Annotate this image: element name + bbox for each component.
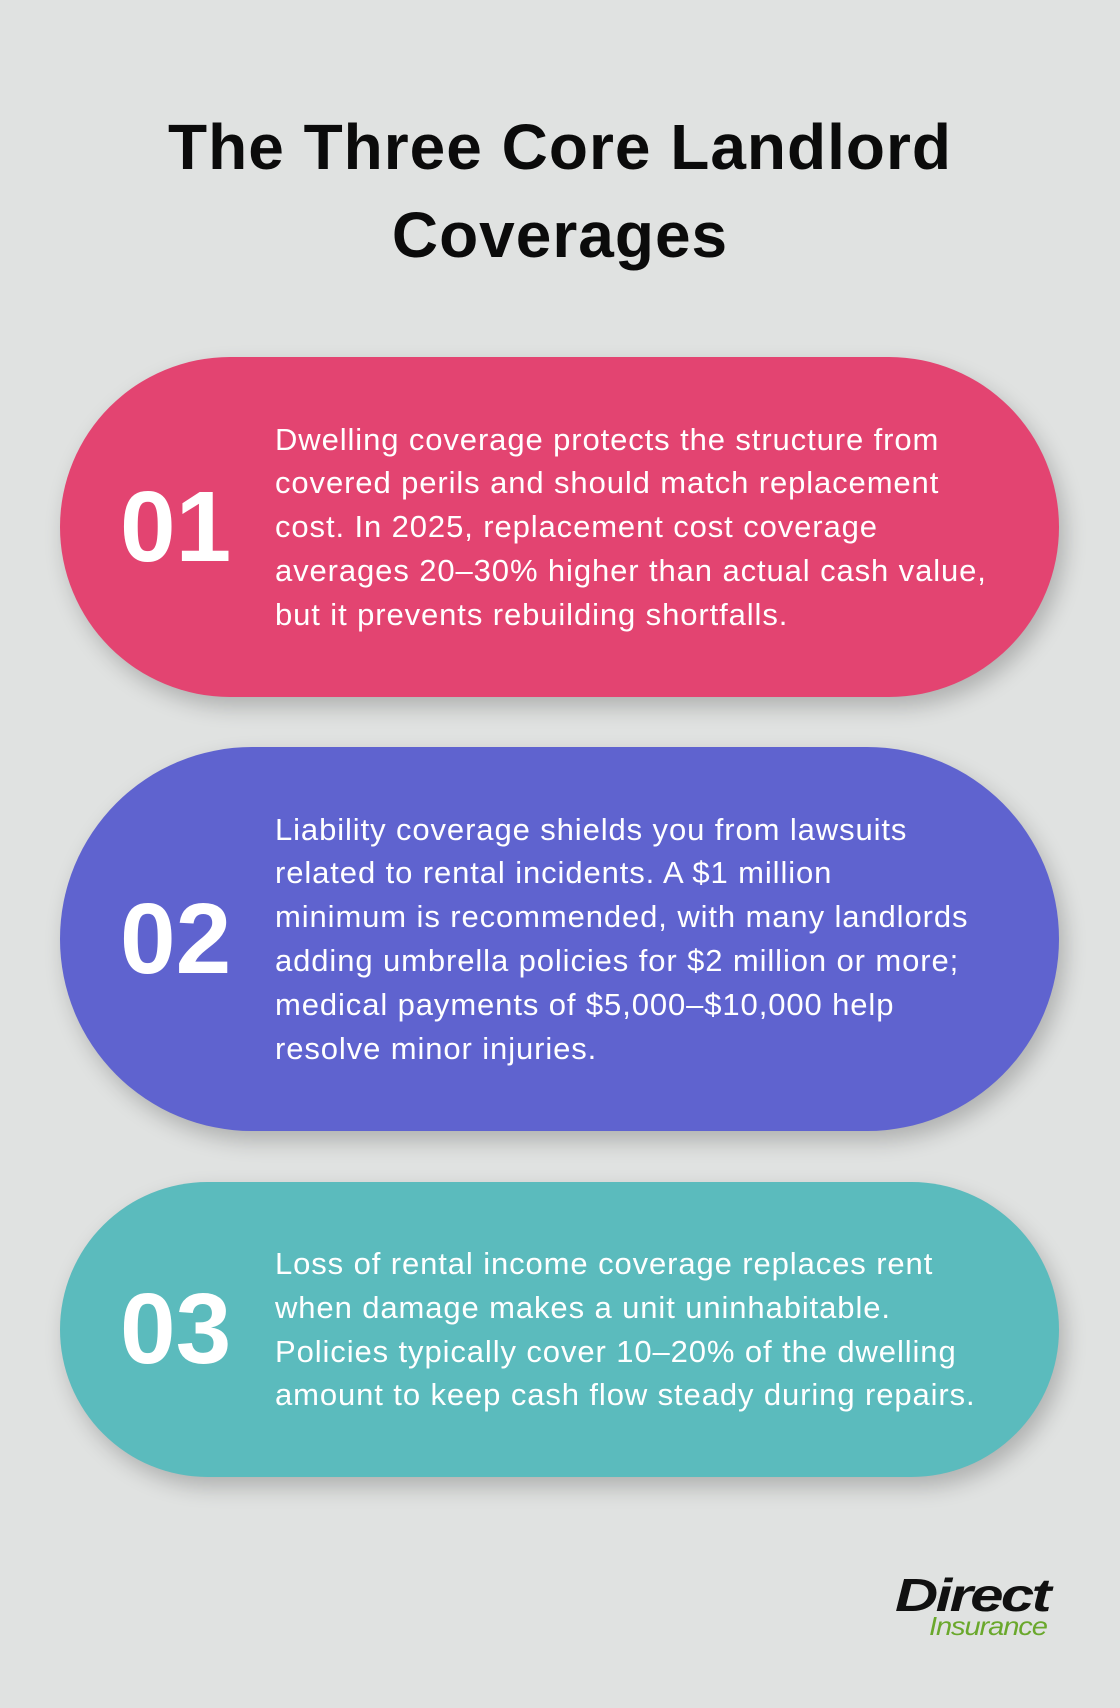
- text: liability: medical payments of $5,000–$10,000 help: [275, 987, 894, 1022]
- text: dwelling: averages 20–30% higher than actual cash value,: [275, 553, 987, 588]
- text: rental income: [275, 1246, 976, 1412]
- number 01: 01: [120, 470, 231, 582]
- number 03: 03: [120, 1273, 231, 1385]
- text: dwelling: [275, 422, 987, 632]
- text: rental income: amount to keep cash flow steady during repairs.: [275, 1377, 976, 1412]
- text: rental income: when damage makes a unit uninhabitable.: [275, 1290, 891, 1325]
- panel: dwelling coverage: [60, 357, 1059, 697]
- text: liability: Liability coverage shields you from lawsuits: [275, 812, 907, 847]
- number 02: 02: [120, 882, 231, 994]
- title: [168, 111, 952, 271]
- logo: Direct Insurance: Insurance: [929, 1611, 1047, 1641]
- text: rental income: Policies typically cover 10–20% of the dwelling: [275, 1334, 957, 1368]
- text: liability: minimum is recommended, with many landlords: [275, 899, 968, 934]
- text: liability: adding umbrella policies for $2 million or more;: [275, 943, 959, 978]
- text: dwelling: cost. In 2025, replacement cost coverage: [275, 509, 878, 544]
- text: liability: related to rental incidents. A $1 million: [275, 855, 832, 890]
- text: rental income: Loss of rental income coverage replaces rent: [275, 1246, 933, 1281]
- panel: liability coverage: [60, 747, 1059, 1131]
- text: liability: resolve minor injuries.: [275, 1031, 597, 1066]
- text: dwelling: but it prevents rebuilding shortfalls.: [275, 597, 788, 632]
- text: dwelling: covered perils and should match replacement: [275, 465, 939, 500]
- logo: Direct Insurance: Direct: [895, 1569, 1049, 1621]
- panel: loss of rental income: [60, 1182, 1059, 1477]
- text: dwelling: Dwelling coverage protects the structure from: [275, 422, 939, 456]
- title: The Three Core Landlord: [168, 111, 952, 183]
- logo: Direct Insurance: [895, 1569, 1054, 1641]
- text: liability: [275, 812, 968, 1066]
- title: Coverages: [392, 199, 728, 271]
